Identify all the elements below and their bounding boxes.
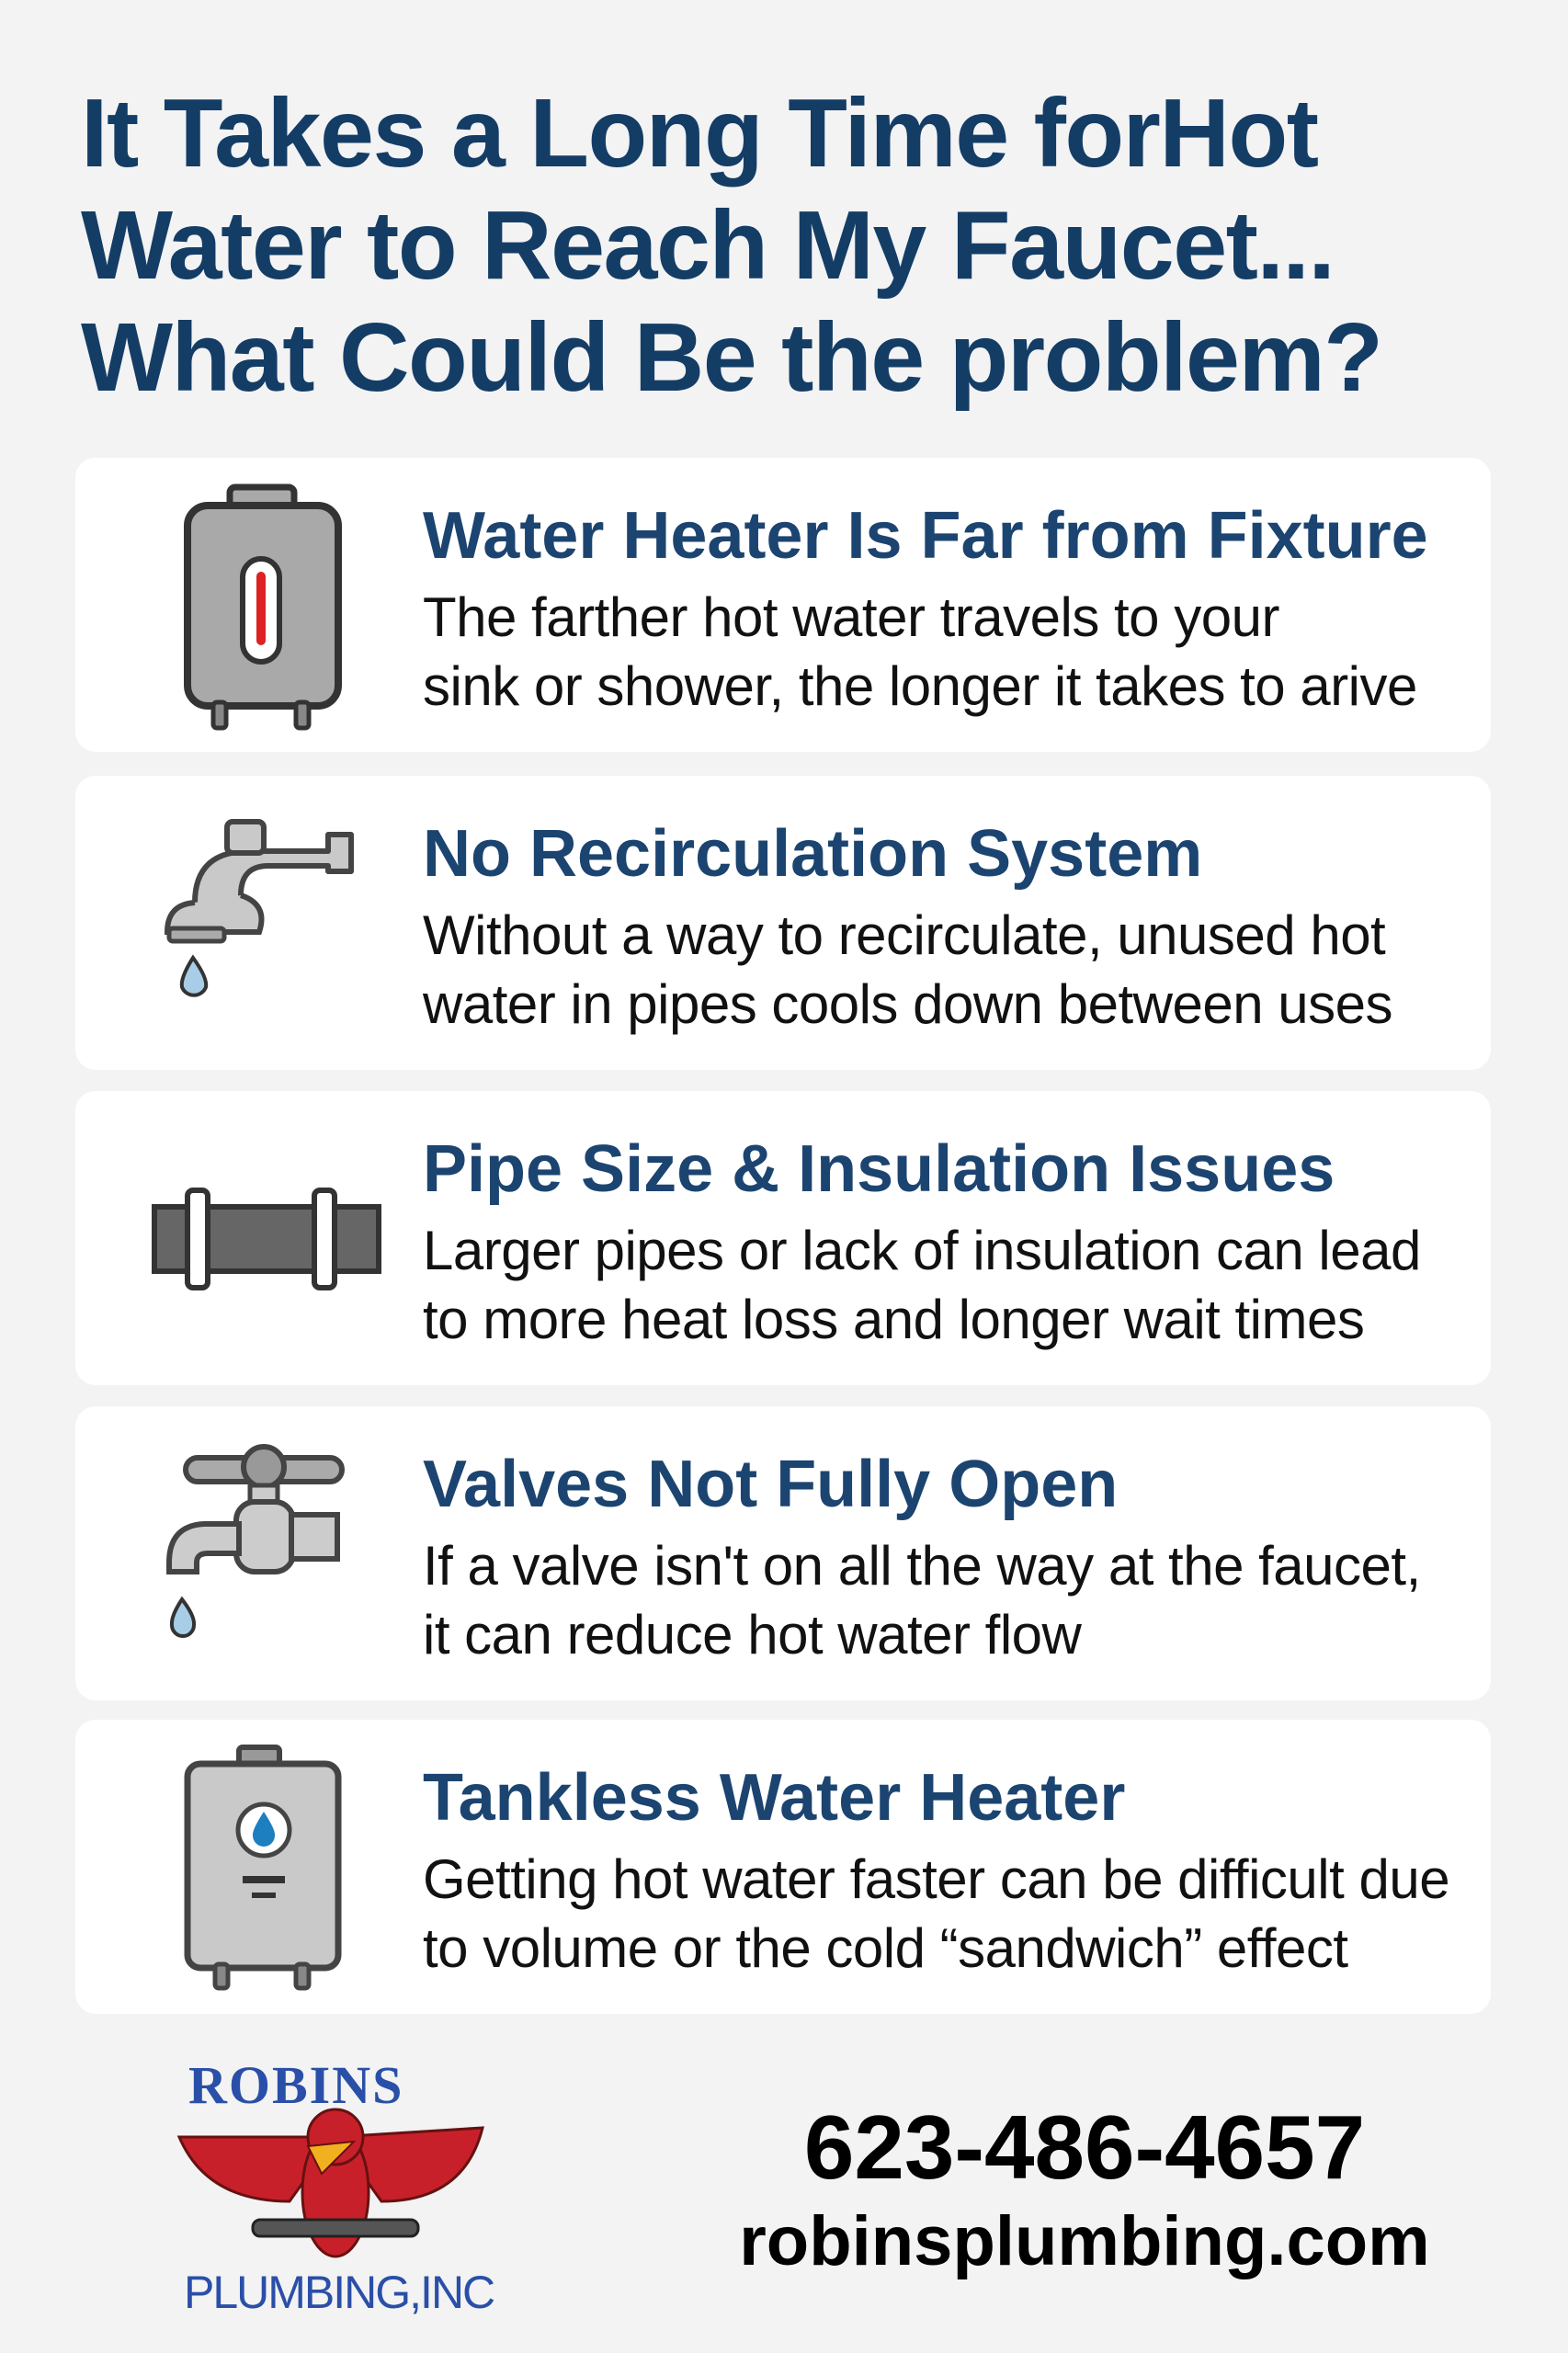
- text: [423, 1220, 1421, 1350]
- text: If a valve isn't on all the way at the faucet,: [423, 1535, 1421, 1597]
- text: water in pipes cools down between uses: [423, 973, 1392, 1035]
- panel: water heater far: [75, 458, 1491, 752]
- title: Water to Reach My Faucet...: [81, 191, 1334, 300]
- title: It Takes a Long Time forHot: [81, 79, 1318, 188]
- heading: No Recirculation System: [423, 817, 1202, 891]
- panel: no recirculation: [75, 776, 1491, 1070]
- text: [423, 1848, 1449, 1979]
- heading: Valves Not Fully Open: [423, 1448, 1118, 1521]
- icon: water heater: [184, 483, 342, 730]
- logo: [176, 2055, 494, 2318]
- phone: 623-486-4657: [804, 2097, 1365, 2198]
- icon: valve faucet: [166, 1444, 345, 1638]
- text: Without a way to recirculate, unused hot: [423, 904, 1385, 966]
- title: [81, 79, 1382, 412]
- icon: pipe: [152, 1188, 381, 1290]
- text: Larger pipes or lack of insulation can lead: [423, 1220, 1421, 1281]
- logo text bottom: PLUMBING,INC: [184, 2267, 494, 2318]
- icon: faucet: [165, 819, 354, 997]
- heading: Pipe Size & Insulation Issues: [423, 1132, 1335, 1206]
- text: [423, 586, 1417, 717]
- text: Getting hot water faster can be difficult due: [423, 1848, 1449, 1910]
- icon: tankless heater: [184, 1745, 342, 1991]
- text: The farther hot water travels to your: [423, 586, 1279, 648]
- logo text top: ROBINS: [188, 2055, 403, 2115]
- text: to volume or the cold “sandwich” effect: [423, 1917, 1348, 1979]
- text: sink or shower, the longer it takes to arive: [423, 655, 1417, 717]
- text: [423, 904, 1392, 1035]
- website: robinsplumbing.com: [739, 2202, 1430, 2280]
- text: to more heat loss and longer wait times: [423, 1289, 1364, 1350]
- title: What Could Be the problem?: [81, 303, 1382, 412]
- text: it can reduce hot water flow: [423, 1604, 1081, 1665]
- panel: tankless: [75, 1720, 1491, 2014]
- panel: pipe size: [75, 1091, 1491, 1385]
- panel: valves: [75, 1406, 1491, 1700]
- icon: robin bird: [176, 2109, 484, 2257]
- heading: Tankless Water Heater: [423, 1761, 1125, 1835]
- heading: Water Heater Is Far from Fixture: [423, 499, 1428, 573]
- text: [423, 1535, 1421, 1665]
